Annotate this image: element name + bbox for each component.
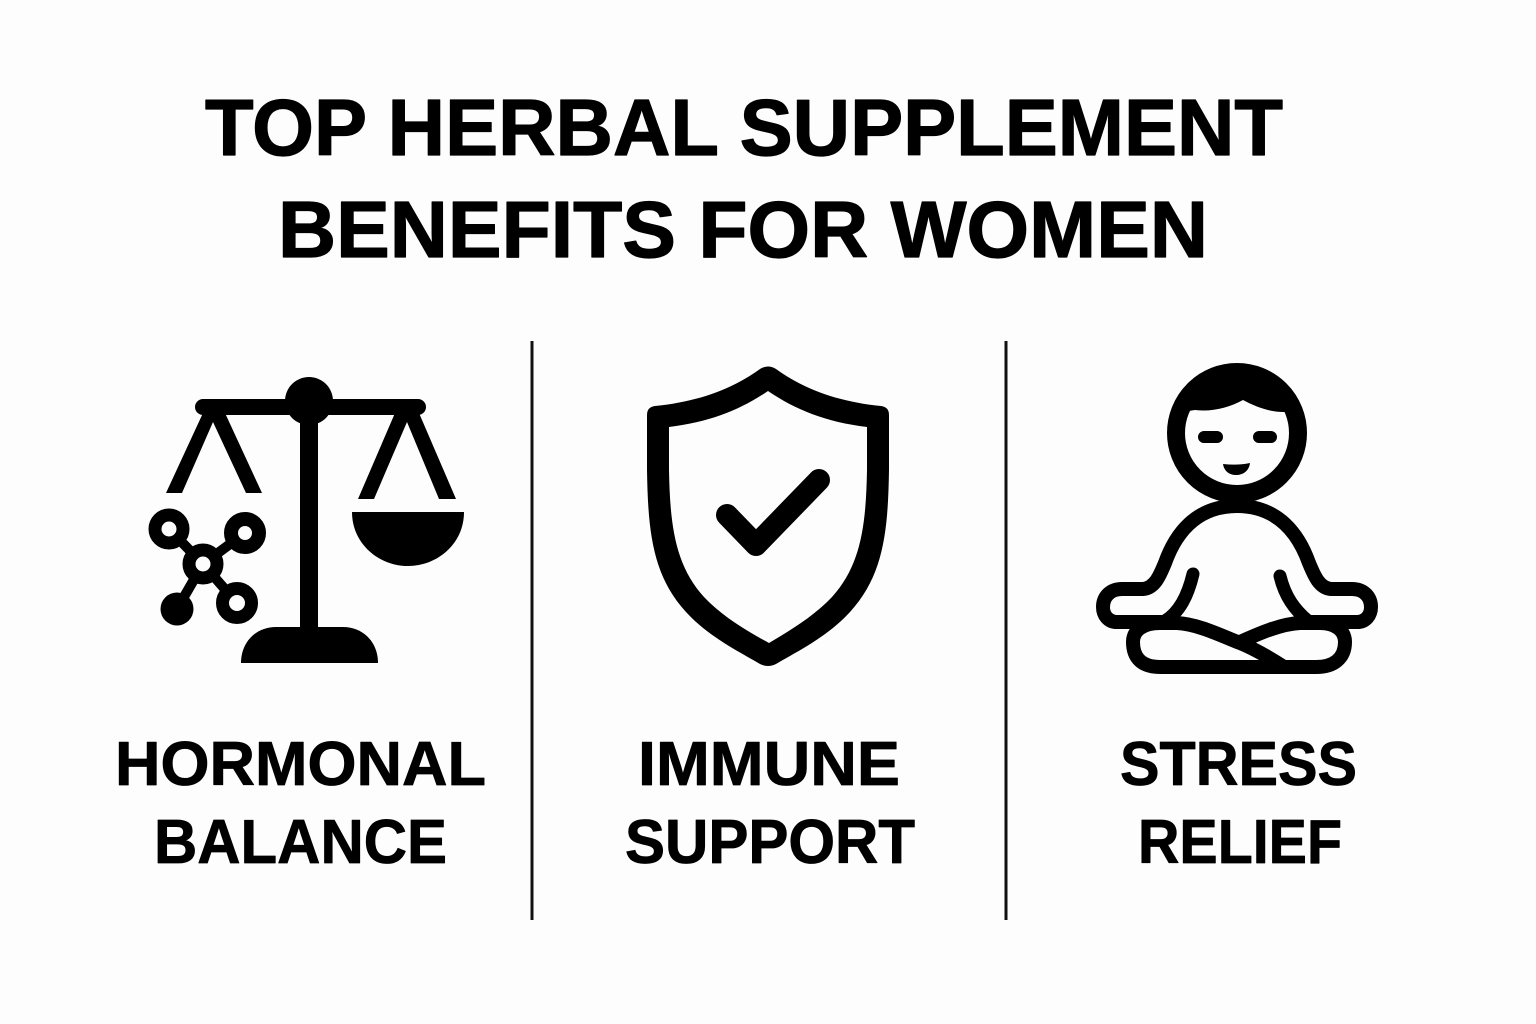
label: hormonal balance: BALANCE: [154, 808, 447, 877]
mouth: [1223, 463, 1250, 475]
label: hormonal balance: [115, 730, 486, 877]
scale beam: [195, 399, 426, 415]
panel: hormonal balance: [115, 377, 486, 877]
molecule: [155, 515, 259, 626]
panel: stress relief: [1103, 370, 1371, 877]
hair: [1182, 370, 1292, 412]
label: hormonal balance: HORMONAL: [115, 730, 486, 799]
scale pillar: [300, 405, 318, 630]
label: stress relief: RELIEF: [1138, 808, 1342, 877]
panel: immune support: [625, 366, 915, 877]
head: [1176, 372, 1298, 494]
title: BENEFITS FOR WOMEN: [278, 185, 1208, 274]
right inner arm: [1280, 576, 1308, 621]
label: stress relief: STRESS: [1120, 730, 1357, 799]
title: [205, 83, 1283, 274]
left inner arm: [1165, 574, 1193, 621]
right pan: [352, 512, 464, 566]
divider right: [1004, 341, 1008, 920]
label: immune support: [625, 730, 915, 877]
scale pivot knob: [285, 377, 333, 425]
divider left: [530, 341, 534, 920]
title: TOP HERBAL SUPPLEMENT: [205, 83, 1283, 172]
scale base: [241, 627, 378, 663]
body outline: [1103, 506, 1371, 622]
label: immune support: IMMUNE: [638, 730, 900, 799]
icon: balance scale with molecule: [155, 377, 464, 663]
icon: shield with check: [647, 366, 889, 666]
eyes: [1204, 431, 1271, 443]
icon: meditating person: [1103, 370, 1371, 667]
shield outline: [647, 366, 889, 666]
check mark: [727, 480, 819, 545]
label: stress relief: [1120, 730, 1357, 877]
right hanger: [358, 413, 456, 499]
label: immune support: SUPPORT: [625, 808, 915, 877]
crossed legs: [1133, 623, 1284, 667]
left hanger: [166, 413, 262, 493]
